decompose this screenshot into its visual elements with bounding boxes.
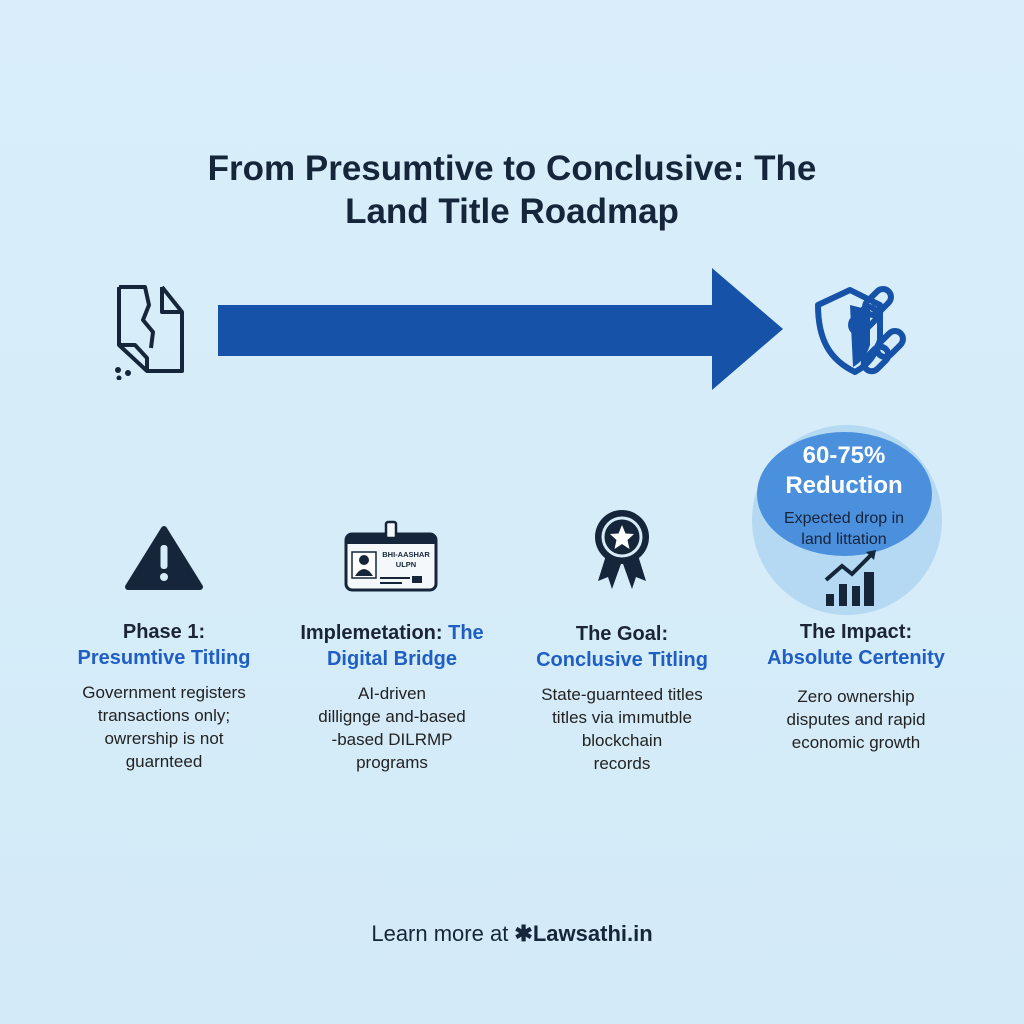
panel: the goal bbox=[536, 510, 708, 773]
panel: the impact: The Impact: bbox=[800, 621, 912, 643]
callout: reduction stat: Reduction bbox=[785, 472, 903, 499]
panel: phase 1: Government registers bbox=[82, 683, 246, 702]
icon: warning bbox=[125, 526, 203, 590]
icon: broken document bbox=[115, 285, 184, 380]
icon: growth chart bbox=[824, 550, 876, 606]
panel: the goal: records bbox=[594, 754, 650, 773]
panel: phase 1: guarnteed bbox=[126, 752, 202, 771]
panel: digital bridge: Digital Bridge bbox=[327, 648, 457, 670]
panel: the goal: The Goal: bbox=[576, 623, 668, 645]
footer: Learn more at ✱Lawsathi.in bbox=[371, 921, 653, 946]
panel: the impact: economic growth bbox=[792, 733, 920, 752]
callout: reduction stat: Expected drop in bbox=[784, 510, 904, 527]
panel: digital bridge: dillignge and-based bbox=[318, 707, 466, 726]
title bbox=[208, 149, 816, 231]
callout: reduction stat: 60-75% bbox=[803, 442, 885, 469]
panel: phase 1 bbox=[77, 526, 250, 771]
icon: award badge bbox=[595, 510, 649, 589]
icon: id card: BHI-AASHAR bbox=[382, 550, 430, 559]
panel: digital bridge bbox=[300, 520, 484, 772]
panel: phase 1: Phase 1: bbox=[123, 621, 205, 643]
panel: the impact: Zero ownership bbox=[797, 687, 915, 706]
panel: the goal: State-guarnteed titles bbox=[541, 685, 703, 704]
panel: the goal: Conclusive Titling bbox=[536, 649, 708, 671]
panel: the goal: titles via imımutble bbox=[552, 708, 692, 727]
panel: digital bridge: Implemetation: The bbox=[300, 622, 484, 644]
panel: the impact bbox=[767, 621, 945, 752]
icon: id card: ULPN bbox=[396, 560, 416, 569]
panel: digital bridge: -based DILRMP bbox=[332, 730, 452, 749]
panel: digital bridge: AI-driven bbox=[358, 684, 426, 703]
panel: phase 1: owrership is not bbox=[104, 729, 224, 748]
callout: reduction stat: land littation bbox=[801, 531, 887, 548]
callout: reduction stat bbox=[752, 425, 942, 615]
panel: the goal: blockchain bbox=[582, 731, 662, 750]
icon: shield with chain bbox=[815, 286, 906, 375]
panel: digital bridge: programs bbox=[356, 753, 428, 772]
panel: the impact: disputes and rapid bbox=[787, 710, 925, 729]
panel: the impact: Absolute Certenity bbox=[767, 647, 945, 669]
title: Land Title Roadmap bbox=[345, 192, 679, 231]
title: From Presumtive to Conclusive: The bbox=[208, 149, 816, 188]
panel: phase 1: Presumtive Titling bbox=[77, 647, 250, 669]
icon: id card bbox=[344, 520, 438, 592]
panel: phase 1: transactions only; bbox=[98, 706, 230, 725]
arrow bbox=[218, 268, 783, 390]
